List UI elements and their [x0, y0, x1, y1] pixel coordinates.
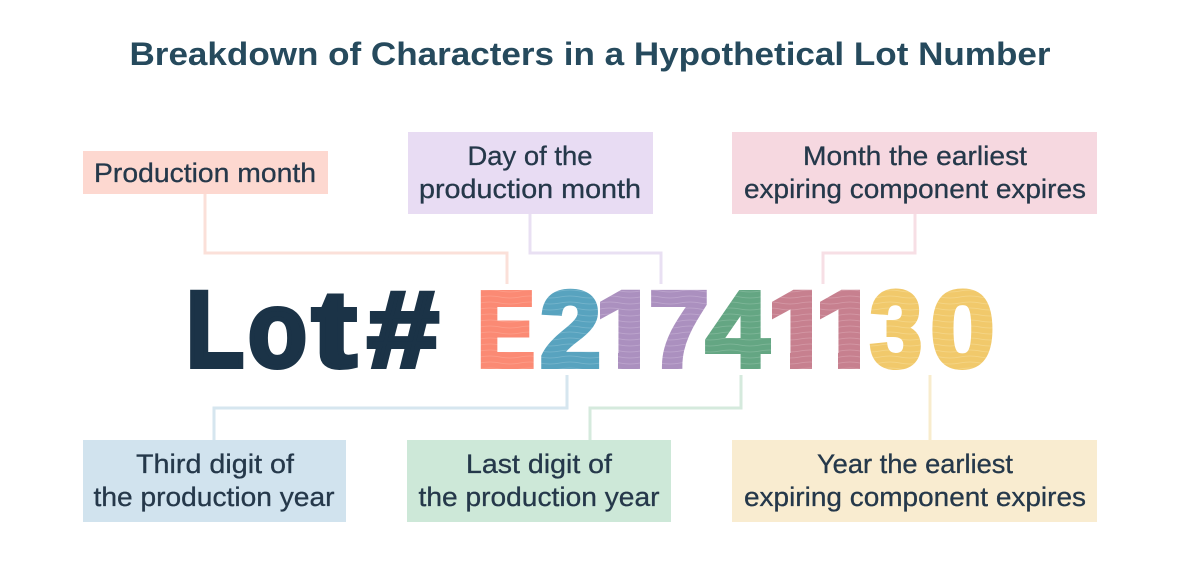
lot number characters: 2: [540, 268, 601, 390]
label: month the earliest component expires: [732, 132, 1097, 214]
lot number characters: 7: [649, 268, 709, 390]
lot number prefix: L: [186, 268, 244, 390]
label: production month: Production month: [94, 158, 316, 188]
connector: production month: [205, 194, 507, 284]
label: day of the production month: production month: [419, 174, 641, 204]
label: year the earliest component expires: [732, 440, 1097, 522]
connector: day of the production month: [530, 214, 661, 284]
lot number prefix: o: [248, 268, 307, 390]
label: day of the production month: [408, 132, 653, 214]
lot number prefix: t: [312, 268, 356, 390]
lot number characters: 1: [592, 268, 661, 390]
lot number characters: E: [477, 268, 535, 390]
lot number characters: 1: [764, 268, 833, 390]
label: day of the production month: Day of the: [468, 141, 592, 171]
label: year the earliest component expires: expiring component expires: [744, 482, 1086, 512]
connector: month the earliest component expires: [823, 214, 915, 284]
lot number prefix: [186, 268, 438, 390]
connector: last digit of the production year: [590, 375, 741, 440]
label: month the earliest component expires: Month the earliest: [803, 141, 1028, 171]
connector: third digit of the production year: [214, 375, 567, 440]
label: third digit of the production year: Third digit of: [136, 449, 295, 479]
title: Breakdown of Characters in a Hypothetical Lot Number: [130, 36, 1050, 72]
lot number characters: 3: [870, 268, 922, 390]
lot number characters: 4: [706, 268, 769, 390]
label: year the earliest component expires: Year the earliest: [817, 449, 1013, 479]
label: third digit of the production year: [83, 440, 346, 522]
lot number characters: [480, 288, 992, 370]
label: month the earliest component expires: expiring component expires: [744, 174, 1086, 204]
lot number characters: 0: [930, 268, 994, 390]
connector: year the earliest component expires: [928, 375, 932, 440]
label: last digit of the production year: the production year: [418, 482, 660, 512]
label: production month: [83, 151, 328, 194]
label: last digit of the production year: Last digit of: [466, 449, 613, 479]
label: third digit of the production year: the production year: [94, 482, 335, 512]
label: last digit of the production year: [407, 440, 671, 522]
lot number characters: 1: [812, 268, 881, 390]
lot number prefix: #: [368, 268, 438, 390]
